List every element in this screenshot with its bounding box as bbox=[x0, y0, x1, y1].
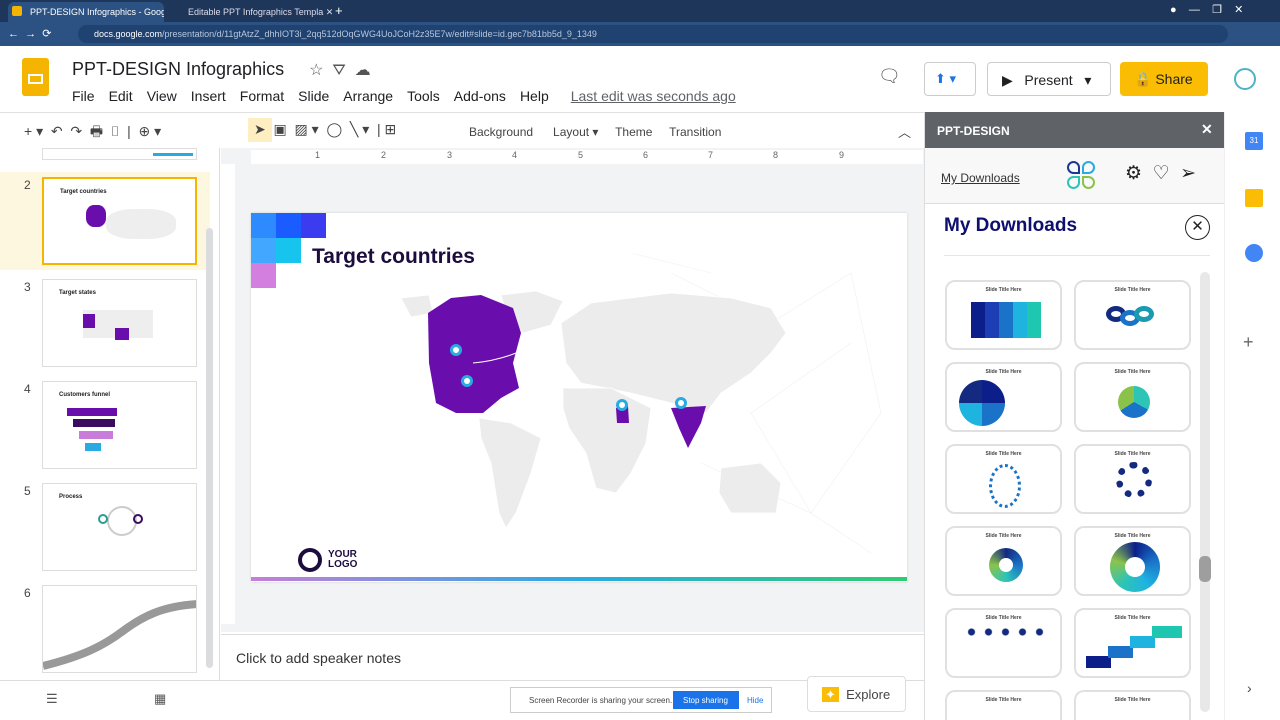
share button: 🔒 Share bbox=[1134, 71, 1193, 87]
right app strip bbox=[1224, 112, 1280, 720]
scrollbar bbox=[1200, 272, 1210, 712]
ruler: 6 bbox=[643, 150, 648, 160]
speaker notes bbox=[221, 634, 924, 680]
toolbar: Background Layout ▾ Theme Transition bbox=[469, 125, 721, 139]
ruler: 4 bbox=[512, 150, 517, 160]
panel nav: My Downloads bbox=[941, 171, 1020, 185]
toolbar: ➤ ▣ ▨ ▾ ◯ ╲ ▾ | ⊞ bbox=[254, 121, 396, 137]
panel header: PPT-DESIGN bbox=[937, 124, 1010, 138]
side panel: Slide Title Here bbox=[1114, 369, 1151, 375]
right app strip: 31 bbox=[1250, 136, 1258, 145]
your logo bbox=[298, 548, 322, 572]
menu: File Edit View Insert Format Slide Arrange Tools Add-ons Help Last edit was seconds ago bbox=[72, 88, 736, 104]
panel title: My Downloads bbox=[944, 215, 1077, 236]
present button: 🗨 bbox=[878, 66, 901, 86]
side panel: Slide Title Here bbox=[985, 451, 1022, 457]
canvas area bbox=[221, 148, 924, 632]
speaker notes: Click to add speaker notes bbox=[236, 650, 401, 666]
filmstrip: 5 bbox=[24, 484, 31, 498]
ruler: 8 bbox=[773, 150, 778, 160]
panel nav: ⚙ ♡ ➢ bbox=[1125, 163, 1196, 184]
ruler: 1 bbox=[315, 150, 320, 160]
bottom bar: Hide bbox=[747, 696, 763, 705]
explore bbox=[807, 676, 906, 712]
app header: ▶ Present ▾ bbox=[1002, 72, 1091, 88]
browser tab bar: ● — ❐ ✕ bbox=[1170, 4, 1243, 16]
screen recorder notice bbox=[510, 687, 772, 713]
filmstrip: 6 bbox=[24, 586, 31, 600]
address bar bbox=[0, 22, 1280, 46]
bottom bar bbox=[0, 680, 924, 720]
side panel: Slide Title Here bbox=[1114, 451, 1151, 457]
world map bbox=[402, 253, 881, 553]
panel header: ✕ bbox=[1201, 121, 1213, 137]
slides logo bbox=[22, 58, 49, 96]
filmstrip: 4 bbox=[24, 382, 31, 396]
ruler: 5 bbox=[578, 150, 583, 160]
browser tab bar bbox=[0, 0, 1280, 22]
right app strip: › bbox=[1247, 680, 1252, 696]
address bar: docs.google.com/presentation/d/11gtAtzZ_dhhIOT3i_2qq512dOqGWG4UoJCoH2z35E7w/edit#slide=id.gec7b81bb5d_9_1349 bbox=[94, 29, 597, 39]
toolbar: + ▾ ↶ ↷ 🖶 ⌷ | ⊕ ▾ bbox=[24, 123, 161, 139]
toolbar bbox=[0, 112, 924, 148]
slide: YOUR bbox=[328, 549, 357, 560]
side panel: Slide Title Here bbox=[1114, 533, 1151, 539]
side panel: Slide Title Here bbox=[1114, 287, 1151, 293]
filmstrip bbox=[0, 148, 220, 680]
side panel: ✕ bbox=[1191, 218, 1204, 235]
slide bbox=[251, 213, 907, 582]
ruler: 3 bbox=[447, 150, 452, 160]
explore: ✦ Explore bbox=[825, 687, 890, 702]
side panel: Slide Title Here bbox=[985, 697, 1022, 703]
toolbar: ︿ bbox=[898, 125, 911, 140]
panel nav bbox=[925, 148, 1225, 204]
active tab bbox=[8, 2, 164, 22]
template thumbnails bbox=[945, 280, 1062, 350]
filmstrip: Target states bbox=[59, 290, 96, 296]
filmstrip: 3 bbox=[24, 280, 31, 294]
side panel: Slide Title Here bbox=[1114, 697, 1151, 703]
filmstrip: Customers funnel bbox=[59, 392, 110, 398]
browser tab bar: + bbox=[335, 3, 343, 18]
slide title: Target countries bbox=[312, 245, 475, 268]
bottom bar: ▦ bbox=[154, 691, 166, 706]
bottom bar: Stop sharing bbox=[683, 696, 728, 705]
side panel: Slide Title Here bbox=[985, 533, 1022, 539]
side panel: Slide Title Here bbox=[985, 369, 1022, 375]
app header: ⬆ ▾ bbox=[935, 71, 956, 86]
filmstrip: Target countries bbox=[60, 189, 107, 195]
panel header bbox=[925, 112, 1225, 148]
side panel: Slide Title Here bbox=[985, 615, 1022, 621]
share button bbox=[1120, 62, 1208, 96]
filmstrip: Process bbox=[59, 494, 82, 500]
ruler: 2 bbox=[381, 150, 386, 160]
filmstrip: 2 bbox=[24, 178, 31, 192]
doc title: PPT-DESIGN Infographics ☆ ⛛ ☁ bbox=[72, 59, 371, 79]
ruler: 7 bbox=[708, 150, 713, 160]
second tab: Editable PPT Infographics Templa ✕ bbox=[188, 7, 332, 17]
screen recorder notice: Screen Recorder is sharing your screen. bbox=[529, 696, 672, 705]
slide: LOGO bbox=[328, 559, 357, 570]
side panel bbox=[924, 112, 1224, 720]
logo squares bbox=[251, 213, 326, 288]
middle east spot bbox=[616, 406, 629, 423]
gradient bar bbox=[251, 577, 907, 581]
app header bbox=[0, 46, 1280, 112]
right app strip: + bbox=[1243, 332, 1254, 352]
address bar: ← → ⟳ bbox=[8, 28, 51, 40]
side panel: Slide Title Here bbox=[1114, 615, 1151, 621]
ruler bbox=[251, 150, 923, 164]
north america bbox=[428, 295, 521, 413]
india bbox=[671, 406, 706, 448]
template thumbnails: Slide Title Here bbox=[985, 287, 1022, 293]
ruler: 9 bbox=[839, 150, 844, 160]
bottom bar: ☰ bbox=[46, 691, 58, 706]
